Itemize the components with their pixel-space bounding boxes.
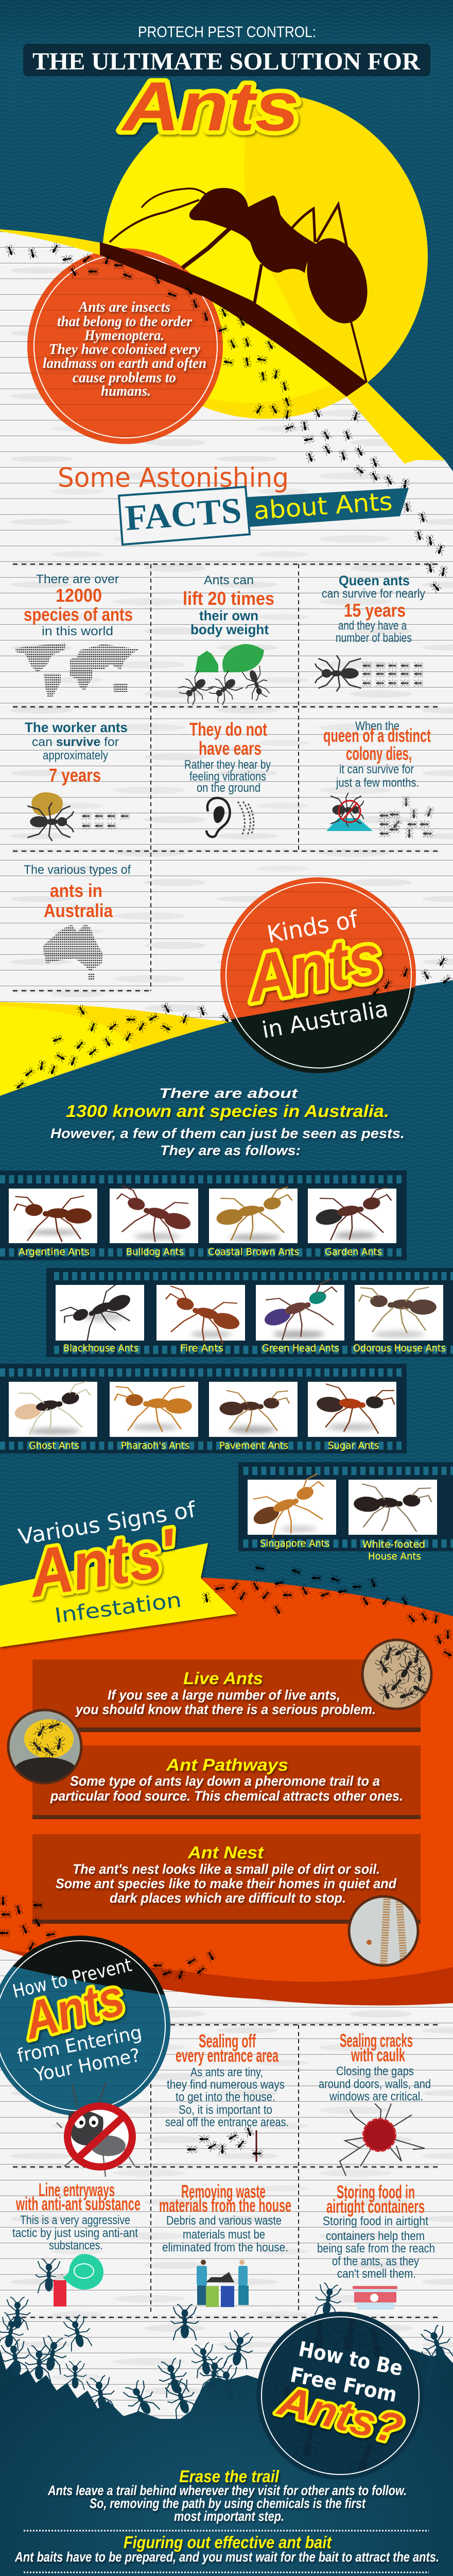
- step: erase the trail: So, removing the path by using chemicals is the first: [90, 2496, 366, 2511]
- intro text: cause problems to: [73, 369, 176, 386]
- tip: sealing cracks: Closing the gaps: [336, 2064, 414, 2078]
- tip: removing waste: materials from the house: [159, 2195, 291, 2216]
- in Australia: in Australia: [260, 996, 390, 1044]
- panel: orange signs section: [0, 1578, 453, 2005]
- fact: queen ants: can survive for nearly: [322, 587, 425, 601]
- strip labels: Pharaoh's Ants: [121, 1440, 189, 1451]
- Ants' logotype: Ants': [23, 1514, 182, 1612]
- photo circle: ant nest: [349, 1896, 418, 1965]
- strip labels: Odorous House Ants: [353, 1343, 446, 1354]
- photo: Fire Ants: [156, 1285, 245, 1350]
- fact: queen ants: [315, 573, 425, 691]
- strip labels: Garden Ants: [325, 1246, 382, 1258]
- fact: 12000 species: 12000: [56, 585, 102, 606]
- fact: queen dies: [323, 719, 435, 839]
- tip: removing waste: materials must be: [183, 2228, 265, 2242]
- strip labels: Green Head Ants: [262, 1343, 339, 1354]
- fact: lift 20 times: their own: [199, 608, 258, 623]
- panel: teal species section: [0, 980, 453, 1649]
- ant trail: signs section: [201, 1563, 453, 1660]
- heading: Ant Nest: [187, 1843, 265, 1862]
- heading: Various Signs of Ants' Infestation: [16, 1497, 198, 1628]
- species intro text: However, a few of them can just be seen as pests.: [50, 1126, 405, 1141]
- icon: ear and vibrations: [206, 798, 254, 837]
- panel: top teal header: [0, 0, 453, 471]
- icon: worker with rock and babies: [27, 792, 130, 841]
- yellow ribbon banner: [0, 1543, 237, 1647]
- photo: Odorous House Ants: [355, 1285, 443, 1341]
- fact: worker ants: can survive for: [32, 735, 119, 749]
- body text: dark places which are difficult to stop.: [110, 1890, 346, 1906]
- fact: no ears: [184, 719, 271, 837]
- strip labels: White-footed: [362, 1539, 425, 1550]
- tip: sealing off: [165, 2030, 289, 2162]
- step: erase the trail: [47, 2467, 407, 2524]
- panel: Ant Pathways: [32, 1745, 421, 1819]
- photo: Green Head Ants: [256, 1278, 346, 1346]
- body text: The ant's nest looks like a small pile of dirt or soil.: [73, 1861, 380, 1877]
- tip: removing waste: eliminated from the house.: [162, 2241, 288, 2255]
- tip: sealing cracks: with caulk: [351, 2044, 406, 2065]
- fact: queen dies: just a few months.: [336, 776, 419, 790]
- body text: particular food source. This chemical attracts other ones.: [50, 1788, 403, 1804]
- fact: no ears: feeling vibrations: [189, 770, 266, 784]
- tip: removing waste: Debris and various waste: [166, 2214, 282, 2228]
- big ant silhouette: [110, 188, 378, 382]
- tip: sealing off: seal off the entrance areas.: [165, 2115, 289, 2129]
- fact: lift 20 times: body weight: [190, 622, 269, 637]
- FACTS text: FACTS: [124, 490, 243, 538]
- Infestation: Infestation: [53, 1588, 183, 1628]
- photo: Pavement Ants: [209, 1382, 298, 1437]
- film strip 2: [46, 1268, 453, 1357]
- tip: sealing off: As ants are tiny,: [190, 2065, 263, 2079]
- fact: ants in Australia: ants in: [50, 880, 102, 901]
- banner: [246, 488, 409, 527]
- icon: dead queen on pedestal and scattered ants: [326, 793, 435, 839]
- fact: lift 20 times: [175, 573, 274, 708]
- photo circle: live ants: [362, 1640, 431, 1709]
- panel: Ant Nest: [32, 1834, 421, 1924]
- tip: storing food: Storing food in airtight: [323, 2214, 428, 2228]
- about Ants: about Ants: [253, 487, 393, 526]
- fact: no ears: They do not: [189, 719, 267, 740]
- tip: removing waste: Removing waste: [181, 2181, 266, 2202]
- strip labels: Coastal Brown Ants: [208, 1246, 299, 1258]
- panel: dark teal ant silhouette hill: [0, 2282, 453, 2576]
- fact: queen dies: colony dies,: [346, 743, 412, 764]
- title text: THE ULTIMATE SOLUTION FOR: [32, 48, 421, 75]
- fact: 12000 species: [15, 572, 139, 697]
- step: effective ant bait: [14, 2533, 439, 2565]
- strip labels: House Ants: [368, 1551, 421, 1562]
- photo: Coastal Brown Ants: [209, 1186, 298, 1245]
- photo circle: ant pathways: [8, 1710, 81, 1783]
- strip labels: [19, 1246, 382, 1258]
- title bar: [23, 44, 430, 76]
- species intro text: 1300 known ant species in Australia.: [66, 1101, 389, 1121]
- title: [23, 24, 430, 145]
- strip labels: Argentine Ants: [19, 1246, 90, 1258]
- film strip 1: [0, 1171, 407, 1260]
- film strip 4: [238, 1462, 453, 1562]
- Your Home?: Your Home?: [32, 2045, 142, 2086]
- species intro text: There are about: [159, 1086, 298, 1101]
- facts grid dividers: [13, 564, 439, 2317]
- intro text: that belong to the order: [57, 313, 193, 330]
- ant trail: left and lower edge of signs section: [0, 1895, 217, 1981]
- tip: storing food: containers help them: [326, 2229, 425, 2243]
- body text: If you see a large number of live ants,: [108, 1687, 340, 1703]
- strip labels: Sugar Ants: [328, 1440, 379, 1451]
- circle: Kinds of Ants in Australia: [220, 877, 416, 1073]
- FACTS stamp box: [119, 487, 250, 545]
- silhouette ants: [0, 2282, 453, 2422]
- fact: 12000 species: species of ants: [24, 604, 133, 625]
- circle: How to Be Free From Ants: [256, 2308, 424, 2480]
- tip: line entryways: [12, 2179, 141, 2307]
- Some Astonishing: Some Astonishing: [58, 463, 289, 494]
- strip labels: [260, 1538, 425, 1562]
- strip labels: Pavement Ants: [219, 1440, 288, 1451]
- tip: line entryways: Line entryways: [39, 2179, 115, 2200]
- tip: line entryways: substances.: [49, 2239, 103, 2252]
- Free From: Free From: [288, 2363, 399, 2407]
- fact: queen ants: 15 years: [344, 600, 406, 621]
- icon: queen and babies: [315, 655, 423, 691]
- Ants? logotype: Ants?: [273, 2377, 407, 2453]
- body text: [56, 1861, 396, 1906]
- strip labels: [63, 1343, 446, 1354]
- How to Be: How to Be: [297, 2337, 405, 2381]
- yellow swoosh band: [0, 229, 445, 464]
- fact: no ears: on the ground: [197, 781, 260, 795]
- body text: Some type of ants lay down a pheromone trail to a: [70, 1773, 380, 1789]
- fact: 12000 species: in this world: [42, 624, 113, 638]
- step: erase the trail: most important step.: [174, 2509, 284, 2524]
- fact: lift 20 times: lift 20 times: [183, 588, 274, 609]
- intro text: [43, 299, 206, 399]
- species intro text: They are as follows:: [160, 1143, 301, 1158]
- fact: worker ants: approximately: [43, 749, 108, 762]
- strip labels: [29, 1440, 379, 1451]
- panel: Live Ants: [32, 1659, 421, 1732]
- kicker text: PROTECH PEST CONTROL:: [138, 24, 316, 41]
- orange intro oval: [27, 248, 223, 444]
- fact: queen dies: it can survive for: [339, 762, 414, 776]
- intro text: Ants are insects: [78, 299, 170, 315]
- photo: Sugar Ants: [308, 1382, 396, 1437]
- Various Signs of: Various Signs of: [16, 1497, 198, 1550]
- strip labels: Fire Ants: [180, 1343, 223, 1354]
- fact: queen ants: and they have a: [338, 619, 407, 633]
- tip: sealing cracks: windows are critical.: [329, 2090, 423, 2104]
- photo: Bulldog Ants: [109, 1185, 198, 1250]
- strip labels: Singapore Ants: [260, 1538, 329, 1549]
- dark brown band: [100, 242, 367, 397]
- fact: ants in Australia: The various types of: [24, 863, 131, 877]
- yellow sun circle: [77, 88, 428, 419]
- body text: you should know that there is a serious problem.: [75, 1702, 376, 1717]
- icon: people and recycling bins: [197, 2260, 249, 2307]
- tip: sealing off: So, it is important to: [179, 2103, 272, 2117]
- tip: line entryways: This is a very aggressive: [20, 2213, 130, 2227]
- film strip 3: [0, 1364, 407, 1453]
- fact: queen dies: When the: [355, 719, 399, 733]
- photo: Pharaoh's Ants: [110, 1382, 198, 1437]
- intro text: landmass on earth and often: [43, 355, 206, 371]
- ant trail: wedge ants: [13, 955, 453, 1092]
- tip: sealing off: every entrance area: [176, 2045, 279, 2066]
- step: erase the trail: Erase the trail: [179, 2467, 280, 2486]
- strip labels: Bulldog Ants: [126, 1246, 184, 1258]
- dotted separators: [24, 2531, 429, 2576]
- step: effective ant bait: Figuring out effective ant bait: [124, 2533, 333, 2552]
- circle: How to Prevent Ants: [0, 1932, 175, 2116]
- fact: worker ants: The worker ants: [25, 720, 128, 735]
- tip: storing food: being safe from the reach: [317, 2242, 435, 2256]
- icon: airtight food box: [353, 2286, 397, 2310]
- photo: White-footed House Ants: [349, 1480, 437, 1535]
- tip: line entryways: with anti-ant substance: [15, 2193, 141, 2214]
- fact: ants in Australia: [24, 863, 131, 980]
- icon: ants blocked by line: [186, 2125, 263, 2162]
- photo: Garden Ants: [308, 1186, 397, 1245]
- icon: dotted world map: [15, 643, 139, 697]
- photo: Singapore Ants: [247, 1473, 336, 1545]
- body text: Some ant species like to make their homes in quiet and: [56, 1876, 396, 1891]
- fact: ants in Australia: Australia: [44, 900, 113, 921]
- tip: sealing cracks: around doors, walls, and: [319, 2077, 431, 2091]
- icon: spray can and dead ant bubble: [36, 2254, 103, 2307]
- fact: worker ants: [25, 720, 130, 841]
- heading: Live Ants: [183, 1669, 263, 1688]
- icon: no ants sign: [57, 2082, 135, 2177]
- tip: storing food: can't smell them.: [337, 2267, 416, 2281]
- icon: cracks and red wax seal: [340, 2104, 425, 2176]
- species intro text: [50, 1086, 405, 1158]
- yellow wedge lower left: [0, 1002, 231, 1096]
- Kinds of: Kinds of: [265, 905, 361, 948]
- heading: Some Astonishing Facts about Ants: [58, 463, 409, 545]
- intro text: Hymenoptera.: [84, 327, 164, 344]
- fact: worker ants: 7 years: [49, 765, 101, 786]
- fact: queen ants: Queen ants: [339, 573, 410, 588]
- icon: dotted Australia map: [43, 924, 102, 980]
- Ants logotype: Ants: [121, 67, 299, 145]
- small ants on circle edge: [369, 966, 412, 998]
- fact: 12000 species: There are over: [36, 572, 119, 586]
- icon: ants carrying leaves: [175, 644, 272, 708]
- fact: no ears: have ears: [199, 738, 262, 759]
- fact: lift 20 times: Ants can: [204, 573, 254, 587]
- photo: Blackhouse Ants: [56, 1281, 144, 1348]
- fact: no ears: Rather they hear by: [184, 758, 271, 772]
- strip labels: Blackhouse Ants: [63, 1343, 138, 1354]
- photo: Ghost Ants: [9, 1381, 97, 1439]
- How to Prevent: How to Prevent: [11, 1955, 134, 2003]
- tip: sealing off: they find numerous ways: [167, 2078, 285, 2092]
- tip: line entryways: tactic by just using anti-ant: [12, 2226, 138, 2240]
- tip: sealing off: Sealing off: [199, 2030, 256, 2052]
- ant trail: from header to facts: [4, 242, 448, 594]
- body text: [50, 1773, 403, 1804]
- from Entering: from Entering: [15, 2022, 144, 2067]
- Ants logotype: Ants: [16, 1968, 130, 2050]
- heading: Ant Pathways: [166, 1755, 288, 1774]
- tip: storing food: [317, 2181, 435, 2310]
- strip labels: Ghost Ants: [29, 1440, 79, 1451]
- body text: [75, 1687, 376, 1717]
- photo: Argentine Ants: [9, 1189, 97, 1243]
- tip: storing food: of the ants, as they: [332, 2255, 419, 2268]
- tip: sealing cracks: [319, 2030, 431, 2176]
- fact: queen ants: number of babies: [336, 631, 412, 645]
- intro text: humans.: [101, 383, 151, 399]
- tip: removing waste: [159, 2181, 291, 2307]
- intro text: They have colonised every: [49, 341, 200, 358]
- Ants logotype: Ants: [240, 920, 388, 1016]
- tip: sealing off: to get into the house.: [176, 2090, 275, 2104]
